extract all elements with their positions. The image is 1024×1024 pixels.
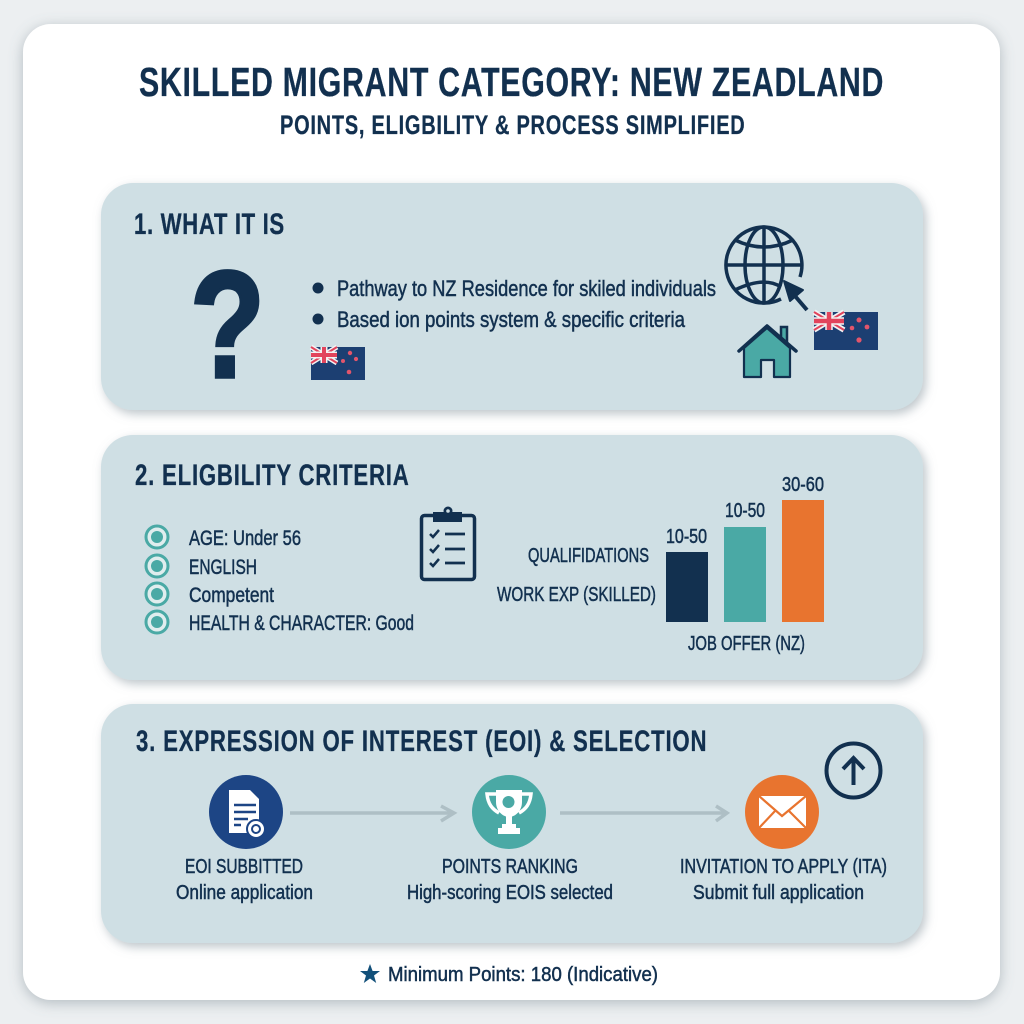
checklist items: ENGLISH (189, 556, 257, 579)
icon: NZ flag small (311, 347, 365, 380)
bar chart: JOB OFFER (NZ) (688, 633, 805, 655)
checklist items: AGE: Under 56 (189, 527, 301, 550)
arrow: step 1 to 2 (290, 806, 454, 821)
bullet list: Pathway to NZ Residence for skiled individuals (337, 276, 716, 301)
bar chart: 10-50 (725, 500, 765, 522)
footer note: Minimum Points: 180 (Indicative) (388, 964, 658, 986)
icon: up arrow circle (826, 744, 880, 798)
panel: expression of interest (101, 704, 923, 943)
step: invitation to apply: Submit full application (693, 882, 864, 904)
arrow: step 2 to 3 (560, 806, 727, 821)
icon: question mark: ? (190, 240, 265, 410)
bullet list: Based ion points system & specific criteria (337, 307, 686, 332)
subtitle: POINTS, ELIGBILITY & PROCESS SIMPLIFIED (280, 110, 745, 141)
checklist items: Competent (189, 584, 274, 607)
heading: EOI: 3. EXPRESSION OF INTEREST (EOI) & SELECTION (136, 724, 707, 758)
step: invitation to apply (680, 775, 887, 904)
panel: eligibility criteria (101, 435, 923, 680)
icon: globe with cursor (726, 227, 807, 310)
step: points ranking (407, 775, 613, 904)
panel: what it is (101, 183, 923, 410)
step: points ranking: High-scoring EOIS selected (407, 882, 613, 904)
heading: eligibility: 2. ELIGBILITY CRITERIA (135, 458, 409, 492)
icon: house (739, 326, 796, 377)
bar chart: 30-60 (782, 474, 824, 496)
step: EOI submitted: EOI SUBBITTED (185, 856, 303, 878)
icon: NZ flag large (814, 312, 878, 350)
step: points ranking: POINTS RANKING (442, 856, 578, 878)
heading: what it is: 1. WHAT IT IS (134, 207, 284, 241)
step: EOI submitted (176, 775, 313, 904)
bar chart: WORK EXP (SKILLED) (497, 584, 656, 606)
bar chart (497, 474, 824, 655)
bullet list (312, 276, 716, 332)
title: SKILLED MIGRANT CATEGORY: NEW ZEADLAND (139, 58, 883, 105)
checklist items (146, 526, 414, 635)
bar chart: QUALIFIDATIONS (528, 545, 649, 567)
checklist items: HEALTH & CHARACTER: Good (189, 612, 414, 635)
step: invitation to apply: INVITATION TO APPLY (ITA) (680, 856, 887, 878)
icon: clipboard (422, 506, 474, 580)
step: EOI submitted: Online application (176, 882, 313, 904)
bar chart: 10-50 (666, 526, 707, 548)
